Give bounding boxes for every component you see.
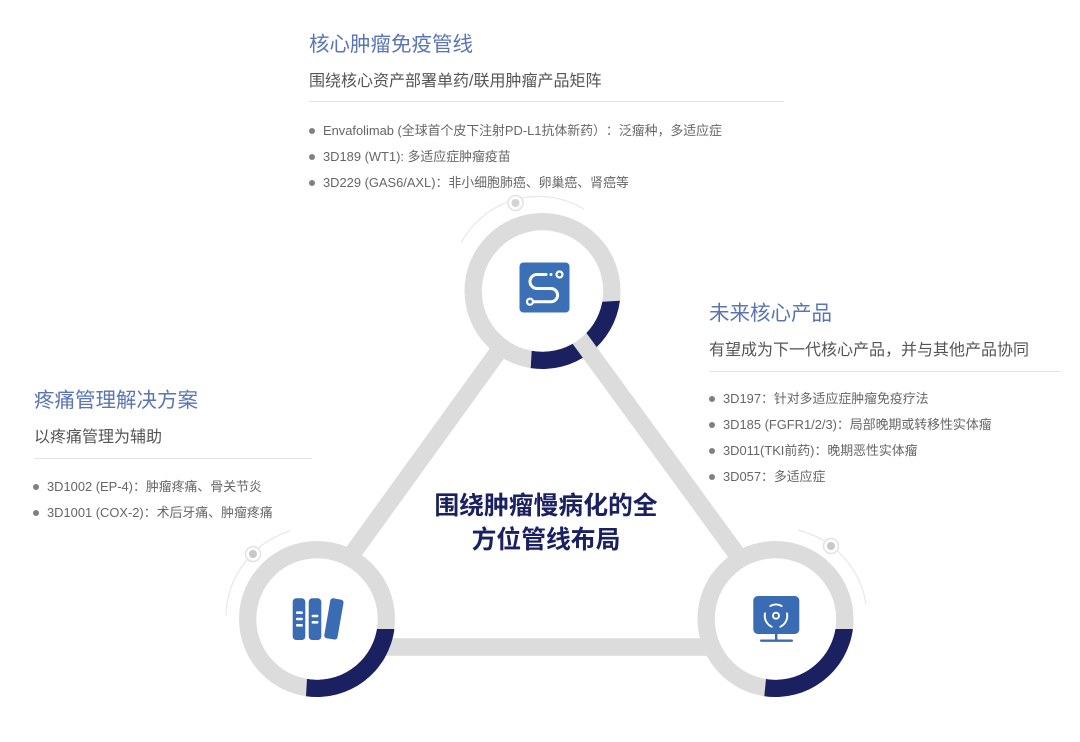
list: 3D189 (WT1): 多适应症肿瘤疫苗 (323, 149, 511, 164)
heading: 未来核心产品 (709, 302, 832, 325)
center title (434, 492, 658, 554)
list: 3D197：针对多适应症肿瘤免疫疗法 (723, 391, 929, 406)
list (709, 391, 992, 484)
ring right base (698, 541, 854, 697)
list (309, 123, 722, 190)
panel: top pipeline (309, 33, 784, 190)
subheading: 以疼痛管理为辅助 (34, 429, 162, 446)
list (33, 479, 273, 520)
icon: top path tile (520, 262, 570, 312)
ring top (464, 213, 620, 369)
subheading: 围绕核心资产部署单药/联用肿瘤产品矩阵 (309, 73, 601, 90)
subheading: 有望成为下一代核心产品，并与其他产品协同 (709, 342, 1029, 359)
list: 3D185 (FGFR1/2/3)：局部晚期或转移性实体瘤 (723, 417, 992, 432)
icon: left books (293, 598, 341, 640)
triangle connectors (342, 323, 746, 647)
list: 3D011(TKI前药)：晚期恶性实体瘤 (723, 443, 918, 458)
heading: 疼痛管理解决方案 (34, 389, 198, 412)
list: Envafolimab (全球首个皮下注射PD-L1抗体新药）：泛瘤种，多适应症 (323, 123, 722, 138)
list: 3D229 (GAS6/AXL)：非小细胞肺癌、卵巢癌、肾癌等 (323, 175, 629, 190)
arc left (306, 629, 394, 697)
ring left base (239, 541, 395, 697)
list: 3D057：多适应症 (723, 469, 825, 484)
orbit arc left (226, 531, 290, 616)
center title: 方位管线布局 (472, 527, 620, 554)
list: 3D1001 (COX-2)：术后牙痛、肿瘤疼痛 (47, 505, 273, 520)
heading: 核心肿瘤免疫管线 (309, 33, 473, 56)
panel: future products (709, 302, 1061, 484)
arc right (764, 629, 853, 697)
list: 3D1002 (EP-4)：肿瘤疼痛、骨关节炎 (47, 479, 262, 494)
orbit arc top (461, 196, 584, 243)
orbit arc right (798, 530, 866, 604)
center title: 围绕肿瘤慢病化的全 (434, 493, 658, 520)
icon: right monitor (753, 596, 799, 642)
inner discs (256, 230, 836, 680)
panel: pain management (33, 389, 312, 520)
